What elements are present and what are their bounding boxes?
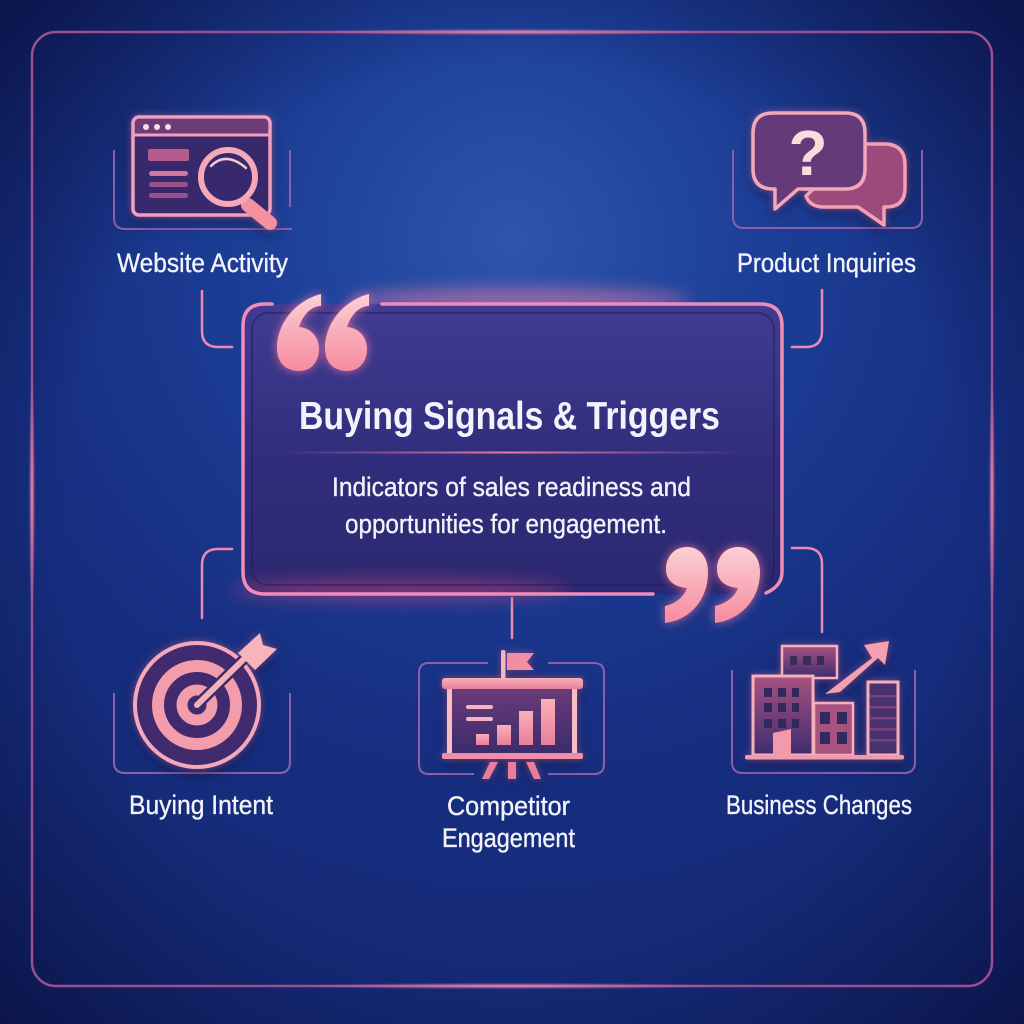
icon: target with arrow [135, 633, 277, 767]
icon: speech bubbles [753, 113, 905, 225]
icon: buildings with growth arrow [745, 641, 904, 760]
description: Indicators of sales readiness and [332, 472, 691, 502]
label: Business Changes [726, 790, 912, 820]
description [332, 472, 691, 539]
panel border [243, 304, 782, 594]
icon: presentation board [442, 650, 583, 779]
icon frame [419, 663, 604, 774]
icon frame [114, 150, 292, 229]
panel: central card [230, 288, 782, 623]
node: website activity [114, 117, 292, 278]
label: Website Activity [117, 248, 288, 278]
label: Buying Intent [129, 790, 273, 820]
label: Competitor [447, 791, 570, 821]
divider [280, 452, 742, 454]
question mark: ? [788, 117, 828, 189]
title: Buying Signals & Triggers [299, 395, 720, 438]
icon: browser with magnifier [133, 117, 270, 223]
label [442, 791, 575, 853]
node: competitor engagement [419, 650, 604, 853]
label: Engagement [442, 823, 575, 853]
opening quote mark [277, 294, 369, 371]
icon frame [114, 693, 290, 773]
closing quote mark [665, 547, 760, 623]
label: Product Inquiries [737, 248, 916, 278]
node: buying intent [114, 633, 290, 820]
description: opportunities for engagement. [345, 509, 667, 539]
connector lines [202, 290, 822, 638]
icon frame [733, 150, 922, 228]
node: business changes [726, 641, 915, 820]
node: product inquiries [733, 113, 922, 278]
icon frame [732, 670, 915, 773]
